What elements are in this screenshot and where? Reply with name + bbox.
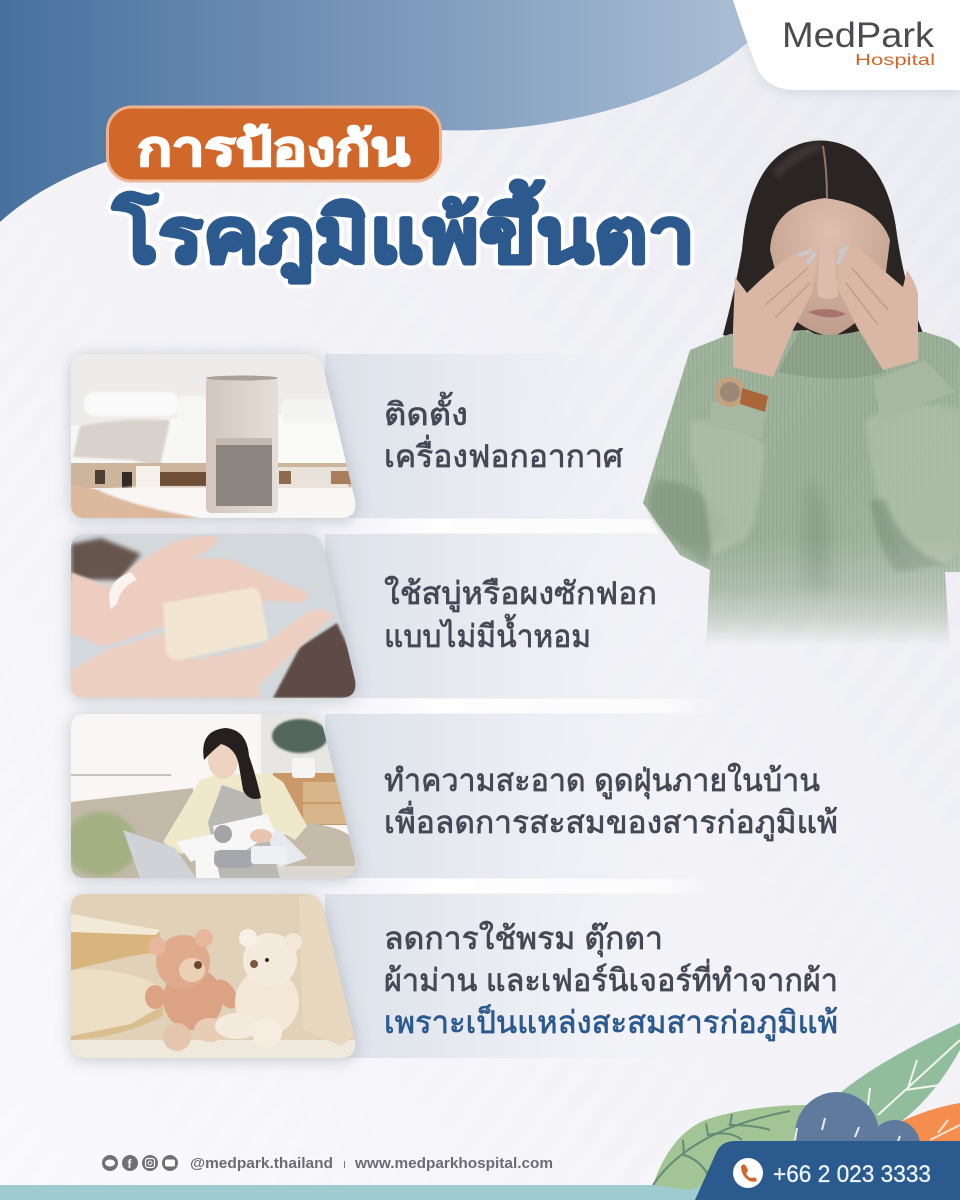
lower pillow [71,969,160,1036]
soap [163,588,268,660]
upper pillow [71,932,160,970]
logo wordmark: MedPark [782,16,935,55]
text: fragrance-free soap: แบบไม่มีน้ำหอม [384,614,591,654]
pillows [84,392,179,416]
duvet [71,418,206,466]
mouth [808,309,846,318]
floor [71,484,200,518]
pallet [71,463,361,488]
photo: air purifier [71,354,361,520]
finger lines [765,268,888,325]
text: vacuum dust: เพื่อลดการสะสมของสารก่อภูมิแพ้ [384,801,838,841]
phone number: +66 2 023 3333 [773,1161,931,1188]
brown teddy [145,929,242,1051]
text: install air purifier: เครื่องฟอกอากาศ [384,435,623,474]
lower hand [71,610,333,698]
apron [208,785,280,878]
photo: woman vacuuming [65,714,361,880]
text: vacuum dust [384,763,838,841]
text: install air purifier: ติดตั้ง [384,392,468,432]
text: install air purifier [384,392,623,474]
text: reduce fabric items: ลดการใช้พรม ตุ๊กตา [384,921,663,958]
text: fragrance-free soap [384,576,657,654]
teal footer band [0,1185,710,1200]
head [203,728,261,799]
sleeve shading [648,480,712,564]
main title: โรคภูมิแพ้ขึ้นตา [112,180,695,283]
header blue curved shape [0,0,748,222]
hair [723,140,925,345]
website: www.medparkhospital.com [354,1155,553,1172]
handle: @medpark.thailand [190,1155,333,1172]
watch [715,377,768,412]
purifier [206,376,278,513]
dark backdrop [71,538,141,580]
plant blur [65,812,137,876]
panel: vacuum strip [325,714,700,878]
logo card [733,0,960,94]
hand left [733,251,817,377]
sweater rib texture [644,330,957,592]
panel: air purifier strip [325,354,700,518]
upper hand [71,536,310,647]
icon: facebook [122,1155,138,1171]
photo: soap in hands [71,534,361,700]
hand right [837,245,918,370]
vacuum [176,814,287,868]
panel: fabric strip [325,894,700,1058]
woman rubbing her eyes [643,140,960,650]
leaf: upper green [840,1023,960,1135]
text: reduce fabric items: เพราะเป็นแหล่งสะสมสารก่อภูมิแพ้ [384,1004,838,1041]
leaf: orange [900,1103,960,1150]
phone panel [695,1141,960,1200]
cabinet [273,773,349,825]
icon: instagram [142,1155,158,1171]
text: reduce fabric items [384,921,838,1041]
rug [98,487,361,518]
social links: f [128,1157,132,1171]
pillow right [270,828,307,867]
main title: โรคภูมิแพ้ขึ้นตา [112,180,695,283]
badge text: การป้องกัน [137,123,410,176]
sweater [643,325,960,650]
sofa [71,788,196,878]
social links [102,1155,553,1172]
nose [818,264,838,299]
shrub: dark blue [795,1092,920,1176]
text: fragrance-free soap: ใช้สบู่หรือผงซักฟอก [384,576,657,612]
logo subtitle: Hospital [855,52,935,69]
white teddy [215,929,302,1048]
pillow left [123,830,196,878]
torso [163,774,307,854]
icon: phone [733,1158,763,1188]
face [770,198,890,337]
text: vacuum dust: ทำความสะอาด ดูดฝุ่นภายในบ้าน [384,763,820,800]
text: reduce fabric items: ผ้าม่าน และเฟอร์นิเจอร์ที่ทำจากผ้า [384,959,838,998]
leaf: lower green [653,1105,810,1190]
icon: line [102,1155,118,1171]
turtleneck [778,330,884,378]
photo: teddy bears [71,894,361,1060]
cuffs [709,402,766,438]
hand [250,829,272,843]
plant [272,719,328,778]
panel: soap strip [325,534,700,698]
title badge [108,107,440,181]
icon: youtube [162,1155,178,1171]
fingernails [800,247,847,262]
